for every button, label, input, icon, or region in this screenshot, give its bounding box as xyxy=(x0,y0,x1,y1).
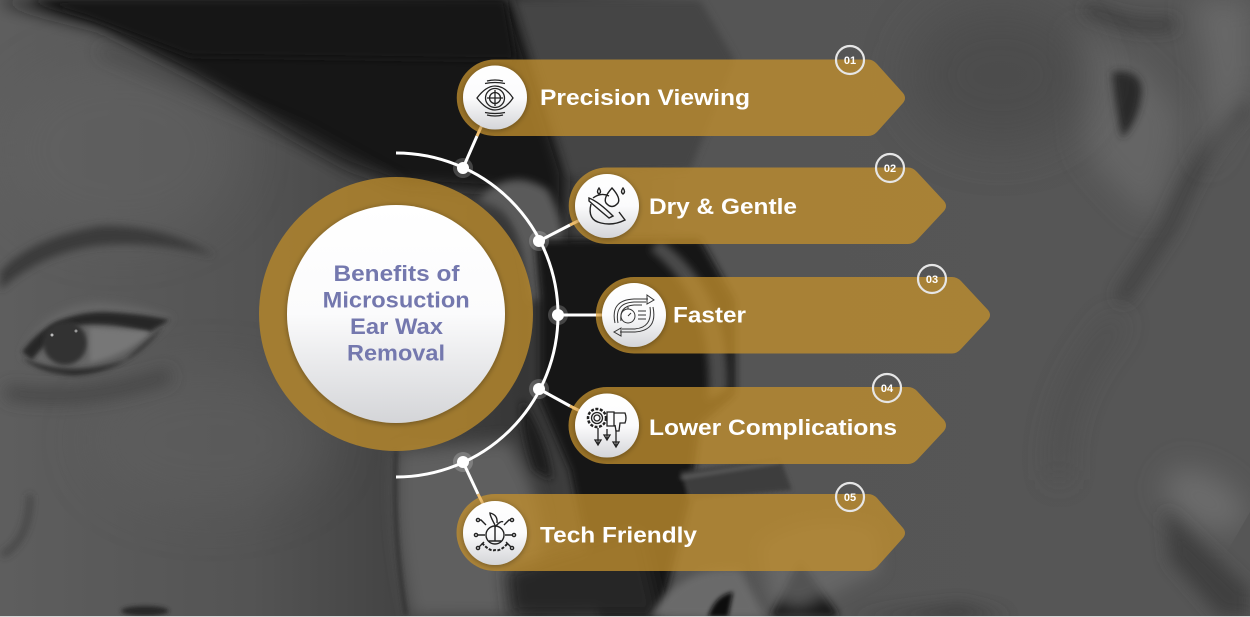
badge 04 xyxy=(873,374,901,402)
panel: 01 Precision Viewing xyxy=(453,46,905,178)
fingers xyxy=(397,440,543,617)
heading 03: Faster xyxy=(673,302,746,328)
badge 01: 01 xyxy=(844,55,856,67)
hair xyxy=(0,0,565,300)
title: Microsuction xyxy=(323,288,470,312)
woman's ear xyxy=(478,180,565,300)
panel: 03 Faster xyxy=(548,265,990,354)
arrow band 03 xyxy=(596,277,990,354)
left eye and brow xyxy=(0,226,215,290)
badge 05 xyxy=(836,483,864,511)
title: Benefits of xyxy=(334,261,460,286)
icon: gear, thumb down and arrows xyxy=(588,409,626,447)
icon: eye with crosshair xyxy=(477,80,513,116)
title xyxy=(323,261,470,366)
icon: drops on leaf xyxy=(589,188,625,224)
arrow band 05 xyxy=(456,494,905,571)
badge 01 xyxy=(836,46,864,74)
badge 03: 03 xyxy=(926,274,938,286)
man's ear and neck xyxy=(1085,8,1175,25)
nose and nostril xyxy=(2,495,30,555)
central disc with title xyxy=(287,205,505,423)
badge 05: 05 xyxy=(844,492,856,504)
panel: 02 Dry & Gentle xyxy=(529,154,946,251)
icon disc 04 xyxy=(575,394,639,458)
icon: plant in gear with circuit nodes xyxy=(474,513,516,550)
connector 02 xyxy=(529,220,580,251)
icon disc 02 xyxy=(575,174,639,238)
otoscope dark body xyxy=(535,238,735,617)
panel: 05 Tech Friendly xyxy=(453,452,905,571)
heading 05: Tech Friendly xyxy=(540,522,698,548)
connector 04 xyxy=(529,379,580,411)
panel: 04 Lower Complications xyxy=(529,374,946,464)
arrow band 04 xyxy=(568,387,946,464)
heading 04: Lower Complications xyxy=(649,415,897,440)
central hub ring xyxy=(259,177,533,451)
title: Ear Wax xyxy=(350,314,444,339)
arc connector xyxy=(396,153,558,477)
icon: stopwatch with swirl arrows xyxy=(614,295,654,336)
title: Removal xyxy=(347,340,445,366)
connector 01 xyxy=(453,125,482,178)
connector 05 xyxy=(453,452,483,504)
badge 02: 02 xyxy=(884,163,896,175)
connector 03 xyxy=(548,305,604,325)
arrow band 01 xyxy=(457,60,905,136)
icon disc 01 xyxy=(463,66,527,130)
heading 01: Precision Viewing xyxy=(540,85,750,110)
badge 02 xyxy=(876,154,904,182)
heading 02: Dry & Gentle xyxy=(649,194,797,219)
icon disc 03 xyxy=(602,283,666,347)
top centre dark gap xyxy=(515,0,735,175)
arrow band 02 xyxy=(569,168,946,244)
badge 04: 04 xyxy=(881,383,894,395)
badge 03 xyxy=(918,265,946,293)
otoscope handle rings xyxy=(680,458,792,500)
icon disc 05 xyxy=(463,501,527,565)
